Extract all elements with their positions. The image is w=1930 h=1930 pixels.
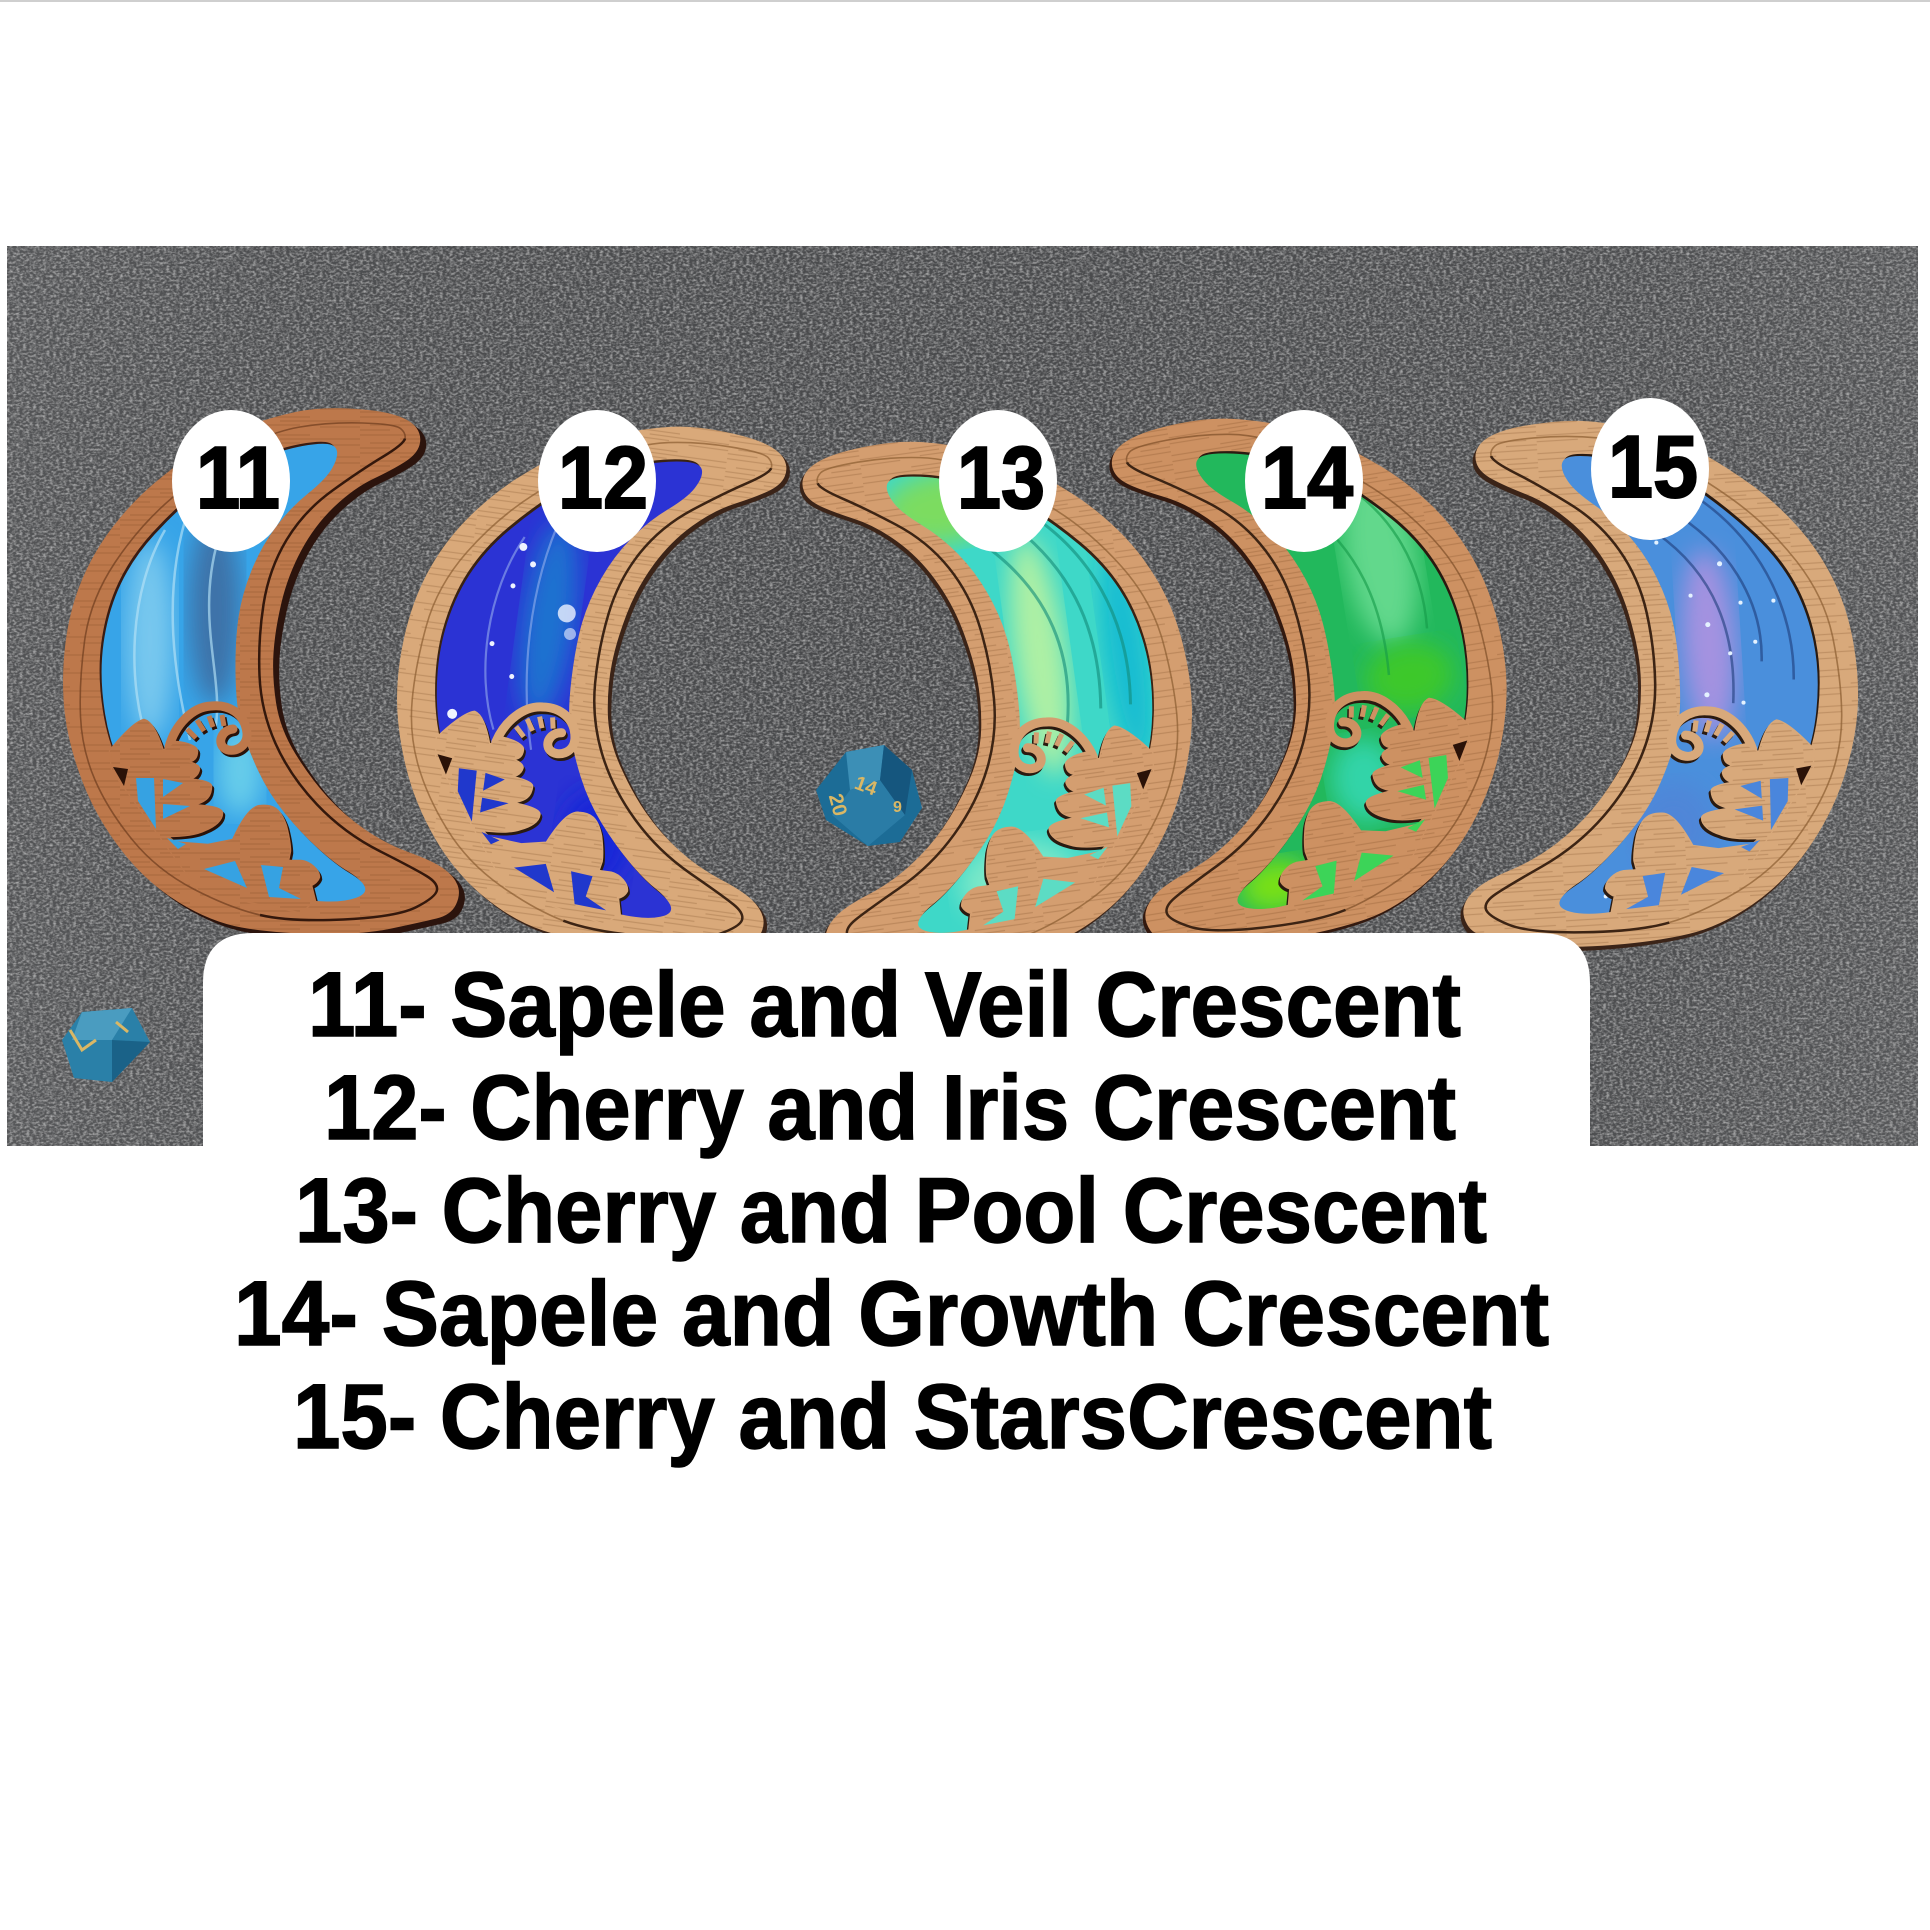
d10 die bbox=[62, 1008, 150, 1082]
white number ovals with labels bbox=[172, 398, 1709, 552]
d20 die bbox=[816, 745, 922, 846]
d20 die: 20 bbox=[824, 791, 851, 819]
crescent 14: sapele and growth bbox=[1109, 418, 1507, 933]
caption text bbox=[234, 954, 1549, 1468]
oval 15: 15 bbox=[1608, 417, 1698, 516]
d20 die: 9 bbox=[893, 799, 902, 816]
caption text: 14- Sapele and Growth Crescent bbox=[234, 1263, 1549, 1365]
page top line bbox=[0, 0, 1930, 2]
caption text: 11- Sapele and Veil Crescent bbox=[308, 954, 1461, 1056]
oval 12: 12 bbox=[558, 428, 648, 527]
crescent 12: cherry and iris bbox=[397, 426, 790, 933]
oval 14: 14 bbox=[1261, 428, 1353, 527]
oval 14 bbox=[1245, 410, 1363, 552]
photo background: grey cloth bbox=[7, 246, 1918, 1146]
oval 11: 11 bbox=[196, 428, 280, 527]
oval 13: 13 bbox=[957, 428, 1045, 527]
oval 11 bbox=[172, 410, 290, 552]
crescent 11: sapele and veil bbox=[63, 408, 465, 939]
d20 die: 14 bbox=[851, 772, 881, 801]
oval 15 bbox=[1591, 398, 1709, 540]
caption text: 13- Cherry and Pool Crescent bbox=[295, 1160, 1487, 1262]
caption text: 15- Cherry and StarsCrescent bbox=[293, 1366, 1492, 1468]
crescent 13: cherry and pool bbox=[800, 442, 1192, 933]
oval 12 bbox=[538, 410, 656, 552]
caption panel bbox=[203, 933, 1590, 1146]
caption text: 12- Cherry and Iris Crescent bbox=[324, 1057, 1456, 1159]
crescent 15: cherry and stars bbox=[1460, 420, 1858, 951]
oval 13 bbox=[939, 410, 1057, 552]
